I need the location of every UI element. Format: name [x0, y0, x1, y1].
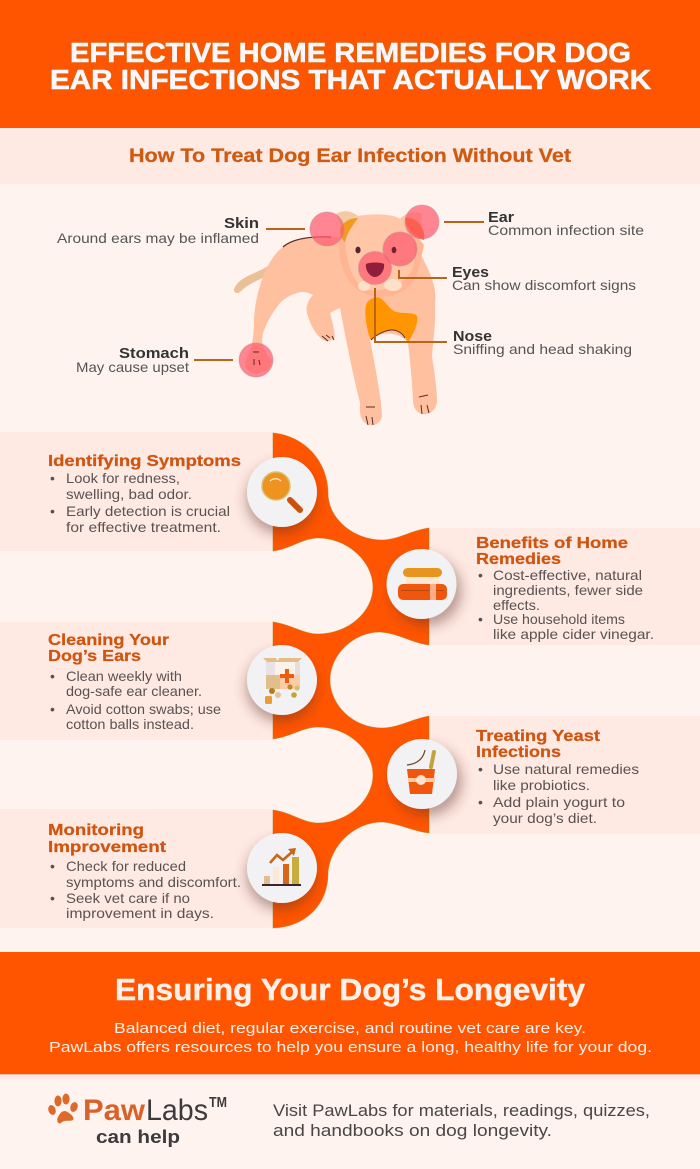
callout: skin: Around ears may be inflamed [57, 230, 259, 246]
panel: cleaning your dog's ears: cotton balls instead. [66, 716, 194, 732]
panel: benefits of home remedies: • [478, 567, 483, 583]
panel: treating yeast infections: • [478, 761, 483, 777]
panel: identifying symptoms [0, 432, 273, 551]
panel: identifying symptoms: Identifying Symptoms [48, 453, 241, 470]
callout: stomach: May cause upset [76, 359, 189, 375]
panel: monitoring improvement: • [50, 890, 55, 906]
closing text: and handbooks on dog longevity. [273, 1121, 552, 1140]
panel: monitoring improvement: • [50, 858, 55, 874]
icon: books [386, 549, 456, 619]
closing text: Visit PawLabs for materials, readings, quizzes, [273, 1101, 650, 1120]
dog illustration [234, 205, 439, 425]
panel: monitoring improvement: symptoms and discomfort. [66, 874, 241, 890]
callout: ear [444, 209, 644, 238]
callout: eyes: Can show discomfort signs [452, 277, 636, 293]
panel: benefits of home remedies: Remedies [476, 551, 561, 568]
panel: identifying symptoms: Look for redness, [66, 470, 180, 486]
red inflammation markers [239, 205, 439, 377]
panel: treating yeast infections: your dog’s diet. [493, 810, 597, 826]
PawLabs logo: Labs [146, 1094, 208, 1127]
callout: ear: Common infection site [488, 222, 644, 238]
panel: treating yeast infections: Infections [476, 744, 561, 761]
panel: treating yeast infections [429, 716, 700, 834]
callout: nose: Nose [453, 328, 492, 345]
callout: nose [375, 288, 632, 357]
panel: benefits of home remedies: Cost-effective, natural [493, 567, 642, 583]
panel: monitoring improvement: Check for reduced [66, 858, 186, 874]
icon: food cup [387, 739, 457, 809]
icon: medical supply box [247, 645, 317, 715]
callout: stomach [76, 345, 233, 375]
panel: cleaning your dog's ears [0, 622, 273, 740]
panel: treating yeast infections: Treating Yeast [476, 728, 601, 745]
footer text: Balanced diet, regular exercise, and routine vet care are key. [114, 1020, 586, 1037]
panel: cleaning your dog's ears: Clean weekly with [66, 668, 182, 684]
callout: eyes [399, 264, 636, 293]
panel: identifying symptoms: for effective treatment. [66, 519, 221, 535]
callout: stomach: Stomach [119, 345, 189, 362]
panel: monitoring improvement [0, 809, 273, 928]
icon: growth chart [247, 833, 317, 903]
callout: skin: Skin [224, 215, 259, 232]
callout: skin [57, 215, 305, 246]
panel: treating yeast infections: Add plain yogurt to [493, 794, 625, 810]
panel: benefits of home remedies: Use household items [493, 611, 625, 627]
panel: monitoring improvement: Improvement [48, 839, 167, 856]
panel: treating yeast infections: • [478, 794, 483, 810]
section heading band [0, 128, 700, 184]
callout: nose: Sniffing and head shaking [453, 341, 632, 357]
panel: benefits of home remedies: effects. [493, 597, 540, 613]
PawLabs logo: can help [96, 1127, 180, 1147]
panel: benefits of home remedies: Benefits of Home [476, 535, 628, 552]
icon: paw [47, 1094, 79, 1123]
footer heading: Ensuring Your Dog’s Longevity [115, 972, 586, 1007]
header banner [0, 0, 700, 128]
section heading band: How To Treat Dog Ear Infection Without Vet [129, 146, 572, 167]
panel: benefits of home remedies: • [478, 611, 483, 627]
callout: ear: Ear [488, 209, 514, 226]
panel: benefits of home remedies: ingredients, fewer side [493, 582, 643, 598]
callout: eyes: Eyes [452, 264, 489, 281]
title: EFFECTIVE HOME REMEDIES FOR DOG [70, 37, 631, 68]
panel: identifying symptoms: swelling, bad odor. [66, 486, 192, 502]
panel: monitoring improvement: Seek vet care if no [66, 890, 190, 906]
panel: identifying symptoms: • [50, 470, 55, 486]
footer text: PawLabs offers resources to help you ensure a long, healthy life for your dog. [49, 1039, 652, 1056]
title: EAR INFECTIONS THAT ACTUALLY WORK [50, 64, 651, 95]
title [50, 37, 651, 95]
panel: treating yeast infections: like probiotics. [493, 777, 590, 793]
panel: cleaning your dog's ears: Cleaning Your [48, 632, 169, 649]
footer text [49, 1020, 652, 1056]
panel: cleaning your dog's ears: dog-safe ear cleaner. [66, 683, 202, 699]
footer banner [0, 952, 700, 1078]
PawLabs logo [47, 1094, 227, 1147]
closing text [273, 1101, 650, 1140]
panel: cleaning your dog's ears: • [50, 668, 55, 684]
panel: treating yeast infections: Use natural remedies [493, 761, 639, 777]
panel: cleaning your dog's ears: • [50, 701, 55, 717]
panel: benefits of home remedies [429, 528, 700, 645]
PawLabs logo: Paw [83, 1094, 146, 1127]
panel: monitoring improvement: Monitoring [48, 822, 144, 839]
orange winding ribbon [273, 433, 429, 928]
panel: identifying symptoms: • [50, 503, 55, 519]
panel: benefits of home remedies: like apple cider vinegar. [493, 626, 654, 642]
panel: monitoring improvement: improvement in days. [66, 905, 214, 921]
panel: cleaning your dog's ears: Dog’s Ears [48, 648, 141, 665]
icon: magnifying glass [247, 457, 317, 527]
panel: identifying symptoms: Early detection is crucial [66, 503, 230, 519]
panel: cleaning your dog's ears: Avoid cotton swabs; use [66, 701, 221, 717]
PawLabs logo: TM [209, 1094, 227, 1111]
